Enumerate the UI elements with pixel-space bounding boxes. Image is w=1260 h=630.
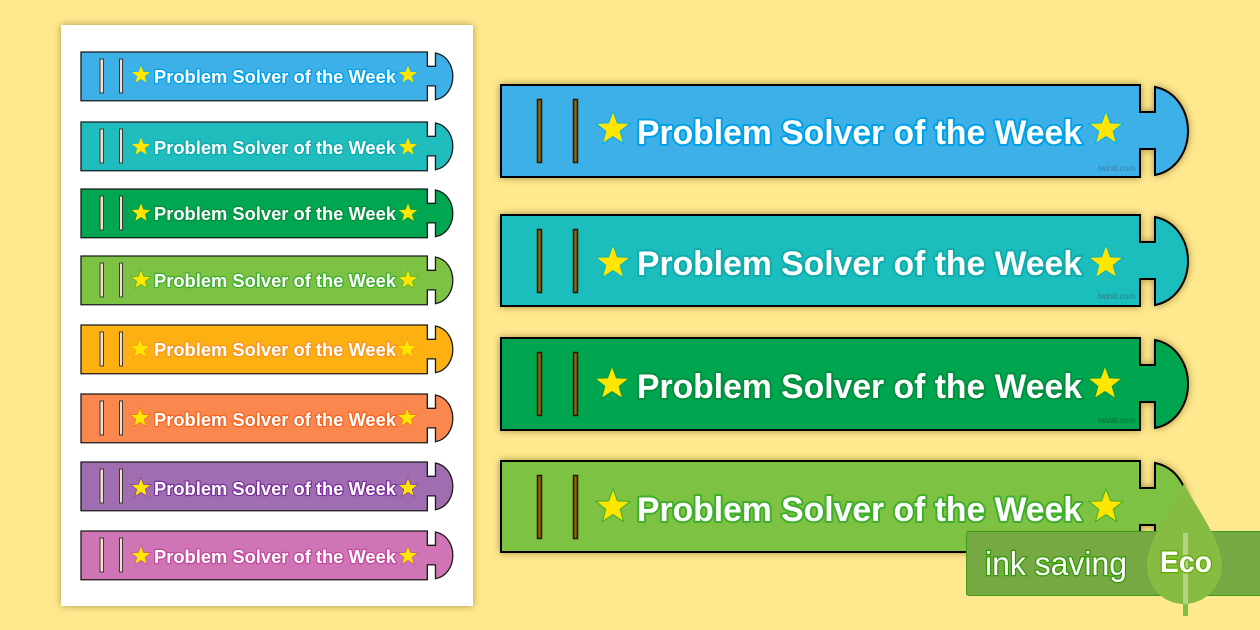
small wristband: lime bbox=[81, 256, 453, 305]
panel: printable sheet bbox=[61, 25, 473, 606]
small wristband: teal bbox=[81, 122, 453, 171]
small wristband: blue: Problem Solver of the Week bbox=[154, 66, 397, 87]
small wristband: coral: Problem Solver of the Week bbox=[154, 409, 397, 430]
small wristband: green bbox=[81, 189, 453, 238]
large wristband: green: twinkl.com bbox=[1098, 416, 1135, 425]
large wristband: blue: Problem Solver of the Week bbox=[637, 114, 1082, 152]
large wristband: green: Problem Solver of the Week bbox=[637, 368, 1082, 406]
ink saving banner: ink saving bbox=[985, 545, 1127, 582]
small wristband: purple: Problem Solver of the Week bbox=[154, 478, 397, 499]
small wristband: purple bbox=[81, 462, 453, 511]
small wristband: green: Problem Solver of the Week bbox=[154, 203, 397, 224]
small wristband: orange: Problem Solver of the Week bbox=[154, 339, 397, 360]
ink saving banner bbox=[966, 532, 1260, 596]
large wristband: teal: twinkl.com bbox=[1098, 292, 1135, 301]
eco badge bbox=[966, 483, 1260, 616]
icon: leaf bbox=[1147, 483, 1222, 616]
small wristband: pink: Problem Solver of the Week bbox=[154, 546, 397, 567]
small wristband: coral bbox=[81, 394, 453, 443]
large wristband: teal bbox=[501, 215, 1188, 306]
large wristband: blue bbox=[501, 85, 1188, 177]
small wristband: teal: Problem Solver of the Week bbox=[154, 137, 397, 158]
small wristband: orange bbox=[81, 325, 453, 374]
large wristband: green bbox=[501, 338, 1188, 430]
small wristband: pink bbox=[81, 531, 453, 580]
large wristband: blue: twinkl.com bbox=[1098, 164, 1135, 173]
large wristband: lime: Problem Solver of the Week bbox=[637, 491, 1082, 529]
eco label: Eco bbox=[1160, 546, 1212, 579]
small wristband: lime: Problem Solver of the Week bbox=[154, 270, 397, 291]
large wristband: teal: Problem Solver of the Week bbox=[637, 245, 1082, 283]
large wristband: lime bbox=[501, 461, 1188, 552]
sheet paper bbox=[61, 25, 473, 606]
small wristband: blue bbox=[81, 52, 453, 101]
